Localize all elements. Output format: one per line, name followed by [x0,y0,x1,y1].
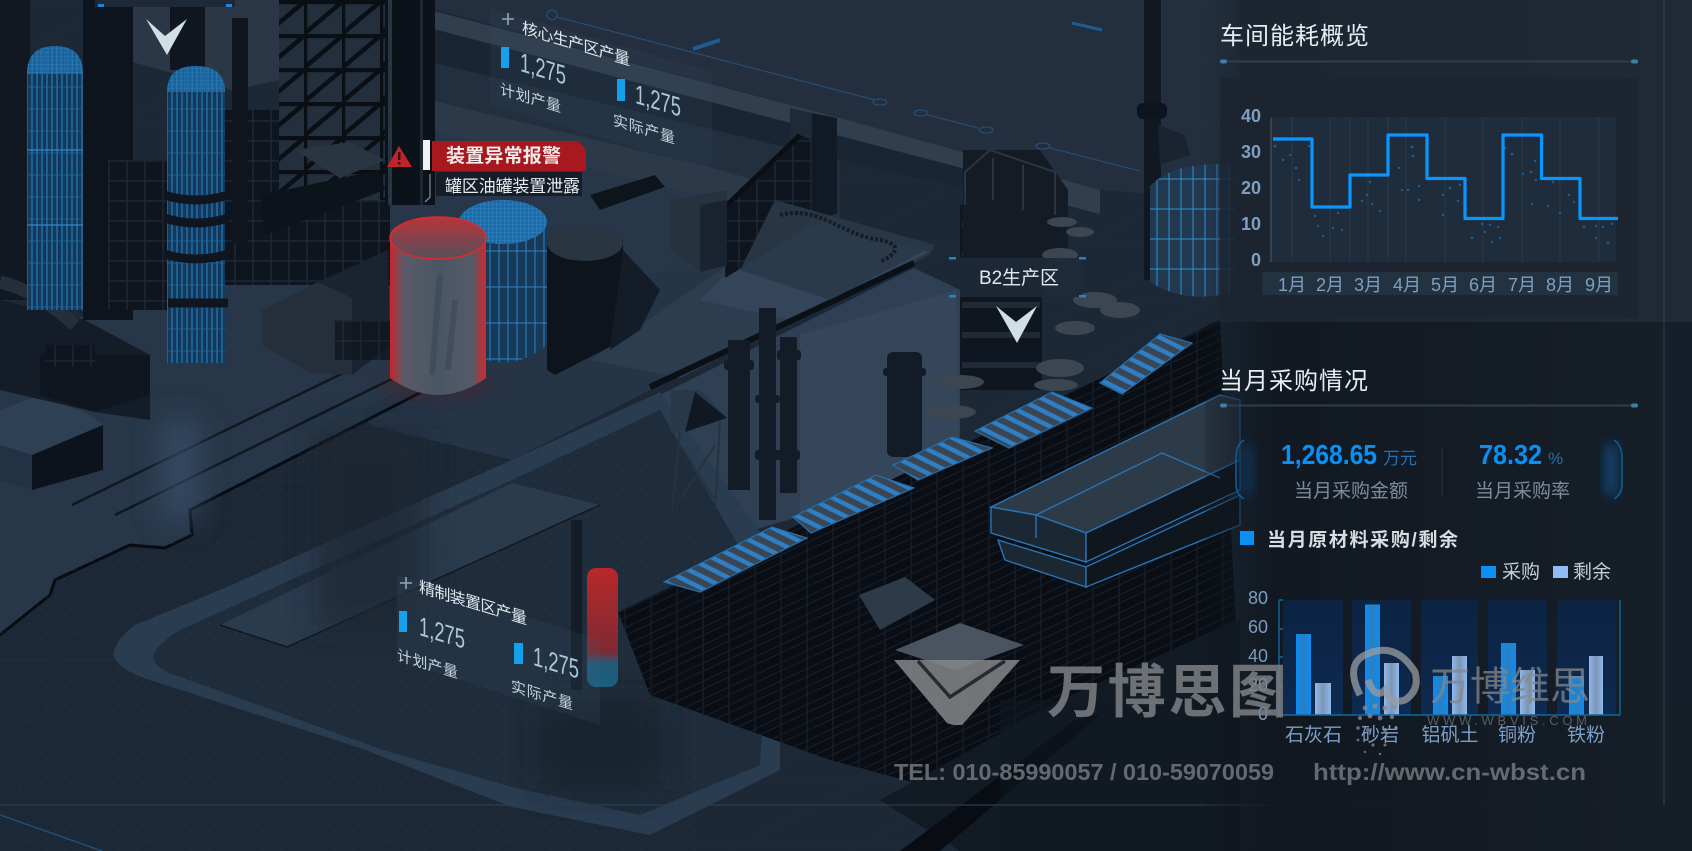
x axis labels: 2月 [1316,275,1344,295]
purchase bars [1296,604,1584,715]
icon: blue wireframe tower 2 [164,66,228,363]
x axis labels [1278,275,1613,295]
panel: core production area output [490,8,712,170]
raised ridge behind tanks [430,10,1100,214]
number: actual: 1,275 [635,79,681,123]
x axis labels: 6月 [1469,275,1497,295]
subheading: raw material: 当月原材料采购/剩余 [1267,528,1458,551]
x axis labels: 8月 [1546,275,1574,295]
swirl logo [1354,650,1416,755]
tank platform light slab [590,215,930,378]
plus icon [502,13,514,25]
KPI: amount: 1,268.65 [1281,439,1377,470]
category labels: 砂岩 [1361,724,1399,746]
y axis labels: 0 [1258,704,1268,724]
KPI label: rate: 当月采购率 [1475,480,1570,502]
heading divider [1220,404,1638,408]
remaining bars [1315,656,1603,715]
watermark: Wanbo Weisi logo [1354,650,1590,755]
central dark process mass [618,320,1240,800]
scatter dots [1274,145,1613,244]
category labels [1285,724,1605,746]
left dark equipment [0,0,435,420]
company name: 万博维思 [1430,665,1590,709]
KPI card: 万元 [1383,449,1417,468]
legend: 剩余 [1573,561,1611,583]
number: planned: 1,275 [419,611,465,655]
ground: upper blueprint field [430,0,1240,200]
category labels: 铝矾土 [1421,724,1479,746]
lower platform inset slab [220,483,600,647]
icon: blue wireframe storage tank [459,200,547,362]
KPI card: % [1548,449,1563,468]
disc machinery [924,217,1140,419]
conveyor segments [664,334,1192,592]
step line series [1273,135,1618,218]
x axis labels: 5月 [1431,275,1459,295]
shed roof [671,390,727,510]
blue wireframe building [991,395,1240,587]
x axis labels: 1月 [1278,275,1306,295]
legend: 采购 [1502,561,1540,583]
lower platform inner field [153,410,770,815]
category labels: 石灰石 [1285,724,1342,746]
wireframe tank behind panel [1150,164,1235,297]
y axis labels: 20 [1248,675,1268,695]
upper left plate [0,130,930,635]
icon: blue wireframe tower 1 [27,46,83,310]
alarm heading: 装置异常报警 [446,145,561,167]
grey box building [262,282,352,375]
back process tower [960,150,1068,390]
icon: red alarm cylinder [380,217,496,401]
top marker: location V icon [95,0,235,55]
category labels: 铜粉 [1498,724,1536,746]
lower small red tower [571,520,618,690]
KPI: rate: 78.32 [1479,439,1542,470]
lower field dots [0,430,700,851]
y axis labels [1241,106,1261,270]
x axis labels: 3月 [1354,275,1382,295]
y axis labels: 10 [1241,214,1261,234]
category labels: 铁粉 [1567,724,1605,746]
logo V mark [894,660,1020,725]
card side glow [1236,440,1622,499]
y axis labels [1248,588,1268,724]
label: actual: 实际产量 [613,112,675,148]
B2 zone label [949,257,1086,343]
lower rounded platform band [113,392,780,835]
heading divider [1220,60,1638,64]
label: planned: 计划产量 [500,81,561,116]
panel: monthly procurement [1219,368,1638,746]
alarm detail: 罐区油罐装置泄露 [445,177,580,196]
heading: refining area: 精制装置区产量 [419,578,527,628]
blueprint circuit lines [547,10,1140,171]
y axis labels: 30 [1241,142,1261,162]
plus icon [400,577,412,589]
left block at bottom [0,395,103,490]
ground grid [0,0,1240,851]
dark steel wall and ramp [670,108,837,278]
label: actual: 实际产量 [511,678,573,714]
y axis labels: 0 [1251,250,1261,270]
bottom right shade [1000,700,1692,851]
y axis labels: 80 [1248,588,1268,608]
number: planned: 1,275 [520,47,566,91]
reflections [160,420,660,790]
heading: energy overview: 车间能耗概览 [1220,23,1369,50]
contact phone: TEL: 010-85990057 / 010-59070059 [894,759,1274,785]
logo wordmark: 万博思图 [1047,660,1287,725]
y axis labels: 40 [1241,106,1261,126]
label: planned: 计划产量 [397,647,458,682]
bar chart: raw material purchase and remaining [1248,588,1620,746]
y axis labels: 40 [1248,646,1268,666]
blue line at lower left [0,815,102,851]
icon: V marker [996,306,1037,343]
dark road edge lines [0,280,640,635]
icon: warning triangle [387,146,412,167]
right panel backdrop [1205,0,1692,851]
number: actual: 1,275 [533,641,579,685]
KPI card [1236,439,1622,502]
watermark: Wanbo Situ logo [894,660,1586,785]
contact url: http://www.cn-wbst.cn [1313,759,1586,785]
process columns [724,308,926,520]
KPI label: amount: 当月采购金额 [1294,480,1408,502]
y axis labels: 20 [1241,178,1261,198]
panel: workshop energy overview [1220,23,1638,318]
x axis labels: 4月 [1393,275,1421,295]
lower platforms within process [859,577,935,630]
smokestack [1137,0,1190,280]
panel: refining area output [397,575,600,725]
alarm callout [387,140,586,202]
line chart: monthly energy [1241,106,1618,295]
equipment bottom cluster [0,300,150,420]
zone text: B2生产区 [979,267,1059,289]
dark tank behind cylinders [547,175,665,375]
legend [1481,561,1611,583]
central disk slab [740,200,935,300]
y axis labels: 60 [1248,617,1268,637]
heading: core area: 核心生产区产量 [522,19,630,69]
x axis labels: 7月 [1508,275,1536,295]
x axis labels: 9月 [1585,275,1613,295]
site text: WWW.WBVIS.COM [1427,713,1587,728]
heading: procurement: 当月采购情况 [1219,368,1368,395]
